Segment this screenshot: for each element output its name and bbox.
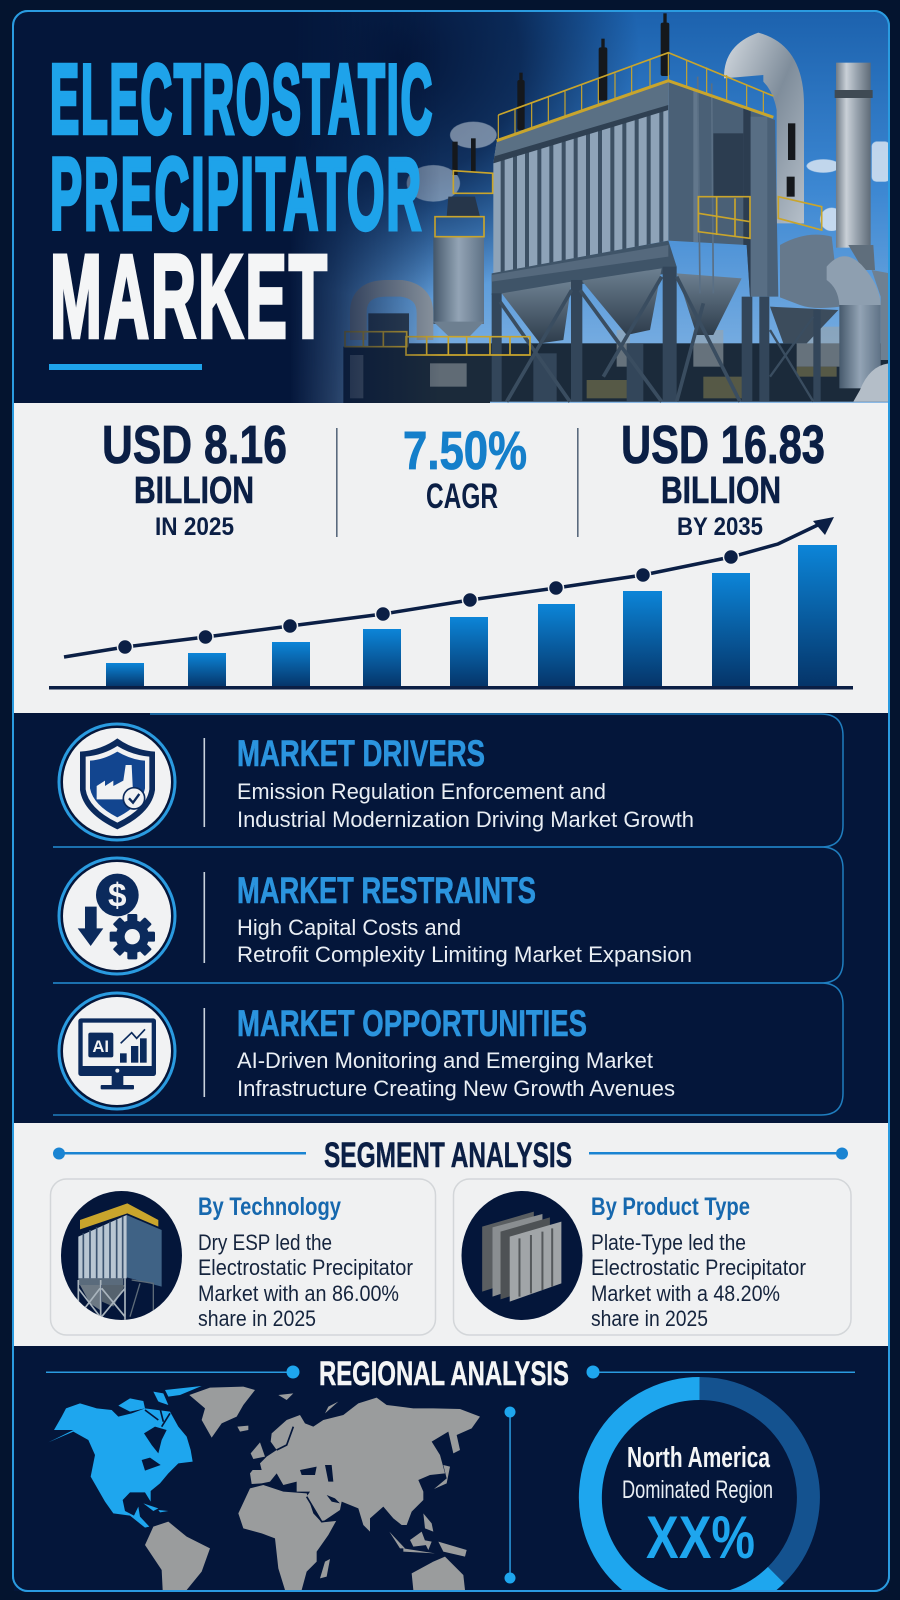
text: Dry ESP led the [198, 1230, 332, 1255]
stat: 2035 market size: USD 16.83 [621, 415, 825, 475]
icon: dollar, arrow and gear: $ [108, 878, 127, 915]
heading and text: Industrial Modernization Driving Market Growth [237, 807, 694, 832]
panel: market dynamics rows [14, 713, 888, 1122]
heading: regional analysis: REGIONAL ANALYSIS [319, 1355, 569, 1393]
icon: AI monitor [59, 993, 175, 1109]
heading and text: MARKET RESTRAINTS [237, 870, 536, 911]
heading and text: Infrastructure Creating New Growth Avenues [237, 1076, 675, 1101]
text: share in 2025 [198, 1306, 316, 1331]
text: Electrostatic Precipitator [198, 1255, 413, 1280]
image: collector plates [462, 1191, 582, 1320]
bar chart [49, 545, 853, 690]
donut chart [590, 1388, 808, 1600]
heading: regional analysis [46, 1361, 855, 1386]
panel: regional analysis [14, 1346, 888, 1600]
row: market restraints [53, 847, 843, 983]
row: market drivers [53, 714, 843, 847]
stat: 2035 market size: BILLION [661, 470, 781, 512]
stat: 2025 market size [102, 415, 287, 541]
heading and text [237, 870, 692, 967]
heading and text: AI-Driven Monitoring and Emerging Market [237, 1048, 654, 1073]
stat: CAGR: 7.50% [403, 421, 527, 481]
icon: dollar, arrow and gear [59, 858, 175, 974]
text: Plate-Type led the [591, 1230, 746, 1255]
card: by product type [454, 1179, 851, 1335]
panel: market size statistics and growth chart [14, 403, 888, 713]
text [591, 1193, 806, 1331]
heading: segment analysis [53, 1136, 848, 1175]
header photo: industrial electrostatic precipitator plant [14, 12, 890, 404]
growth trend line with arrow [64, 517, 834, 657]
text: PRECIPITATOR [50, 137, 423, 251]
text: By Product Type [591, 1193, 750, 1221]
heading and text: MARKET DRIVERS [237, 733, 485, 774]
title underline [49, 364, 202, 370]
region: North America highlighted [48, 1386, 202, 1528]
row: market opportunities [53, 983, 843, 1115]
text: Market with a 48.20% [591, 1281, 780, 1306]
stat: 2025 market size: IN 2025 [155, 513, 234, 541]
text [198, 1193, 413, 1331]
heading and text: Emission Regulation Enforcement and [237, 779, 606, 804]
icon: shield with factory [59, 724, 175, 840]
stat: 2035 market size: BY 2035 [677, 513, 763, 541]
title [50, 44, 434, 363]
region: rest of world [145, 1387, 480, 1590]
heading and text: High Capital Costs and [237, 915, 461, 940]
text: Market with an 86.00% [198, 1281, 399, 1306]
text: By Technology [198, 1193, 341, 1221]
stat: CAGR [403, 421, 527, 516]
world map [48, 1386, 480, 1590]
panel: segment analysis [14, 1123, 888, 1346]
card: by technology [50, 1179, 436, 1335]
donut labels: XX% [646, 1504, 755, 1571]
text: share in 2025 [591, 1306, 708, 1331]
donut labels: North America [627, 1442, 771, 1474]
heading and text: MARKET OPPORTUNITIES [237, 1003, 587, 1044]
stat: 2035 market size [621, 415, 825, 541]
title: MARKET [50, 231, 329, 363]
vertical connector [504, 1406, 516, 1584]
heading and text [237, 733, 694, 832]
stat: 2025 market size: USD 8.16 [102, 415, 287, 475]
heading and text [237, 1003, 675, 1101]
icon: AI monitor: AI [92, 1037, 109, 1056]
text: ELECTROSTATIC [50, 44, 434, 154]
donut labels: Dominated Region [622, 1476, 773, 1504]
donut labels [624, 1446, 772, 1558]
stat: CAGR: CAGR [426, 477, 498, 516]
text: Electrostatic Precipitator [591, 1255, 806, 1280]
image: dry ESP unit [61, 1191, 182, 1320]
heading and text: Retrofit Complexity Limiting Market Expansion [237, 942, 692, 967]
stat: 2025 market size: BILLION [134, 470, 254, 512]
heading: segment analysis: SEGMENT ANALYSIS [324, 1136, 572, 1175]
